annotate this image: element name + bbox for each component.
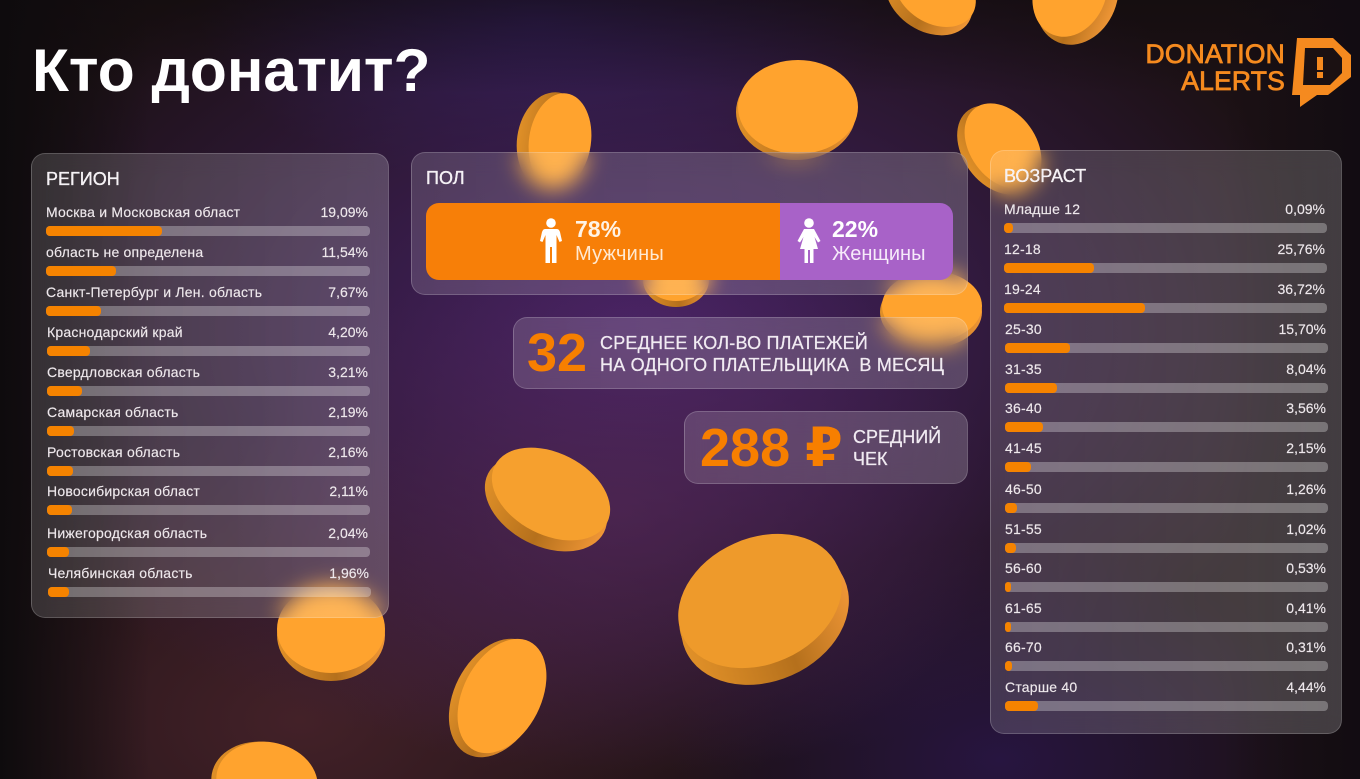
row: Санкт-Петербург: 7,67% [328,284,368,300]
row: 66-70: 66-70 [1005,639,1042,655]
stat caption: НА ОДНОГО ПЛАТЕЛЬЩИКА В МЕСЯЦ [600,355,944,375]
coin top centre-right [871,0,989,51]
row: 51-55 [1005,521,1328,553]
segment: men [426,203,780,280]
row: Челябинская: 1,96% [329,565,369,581]
logo: Donation Alerts [1146,38,1351,107]
row: не определена: область не определена [46,244,203,260]
stat caption [853,426,941,469]
men label: Мужчины [575,243,664,265]
coin under gender panel [643,247,709,307]
row: Челябинская: Челябинская область [48,565,193,581]
segment: women [780,203,953,280]
row: 56-60 [1005,560,1328,592]
row: 12-18: 12-18 [1004,241,1041,257]
row: 36-40 [1005,400,1328,432]
coin below region panel [277,585,385,681]
row: 46-50: 46-50 [1005,481,1042,497]
row: 61-65 [1005,600,1328,632]
row: Нижегородская [47,525,370,557]
stat number 32: 32 [527,323,587,383]
row: over 40: 4,44% [1286,679,1326,695]
row: 12-18: 25,76% [1278,241,1325,257]
row: 36-40: 3,56% [1286,400,1326,416]
row: 61-65: 61-65 [1005,600,1042,616]
row: Краснодарский край: Краснодарский край [47,324,183,340]
panel: gender [411,152,968,295]
row: Самарская: Самарская область [47,404,179,420]
panel: region [31,153,389,618]
row: Свердловская [47,364,370,396]
row: 19-24: 19-24 [1004,281,1041,297]
row: Новосибирская [47,483,370,515]
row: 61-65: 0,41% [1286,600,1326,616]
title: Кто донатит? [32,36,430,104]
row: 31-35: 31-35 [1005,361,1042,377]
row: 19-24: 36,72% [1278,281,1325,297]
coin right of stats [880,271,982,348]
row: Новосибирская: 2,11% [329,483,368,499]
row: Свердловская: 3,21% [328,364,368,380]
row: не определена: 11,54% [322,244,368,260]
row: 56-60: 56-60 [1005,560,1042,576]
row: Ростовская: Ростовская область [47,444,180,460]
heading: gender: ПОЛ [426,168,465,188]
icon: woman [798,218,820,263]
stat caption [600,332,944,376]
stat card: average check [684,411,968,484]
coin top right [1019,0,1133,57]
row: 46-50 [1005,481,1328,513]
row: 25-30: 15,70% [1279,321,1326,337]
row: over 40 [1005,679,1328,711]
row: over 40: Старше 40 [1005,679,1077,695]
row: under 12: Младше 12 [1004,201,1080,217]
row: 66-70: 0,31% [1286,639,1326,655]
row: Ростовская [47,444,370,476]
coin behind gender panel right [941,89,1057,210]
row: 31-35 [1005,361,1328,393]
row: 36-40: 36-40 [1005,400,1042,416]
row: Самарская: 2,19% [328,404,368,420]
coin upper centre [736,60,858,160]
row: Самарская [47,404,370,436]
row: Санкт-Петербург: Санкт-Петербург и Лен. область [46,284,262,300]
coin bottom centre-left [430,623,564,773]
coin middle [469,429,626,571]
row: не определена [46,244,370,276]
row: Краснодарский край [47,324,370,356]
icon: man [540,218,562,263]
row: Новосибирская: Новосибирская област [47,483,200,499]
heading: age: ВОЗРАСТ [1004,166,1086,186]
row: under 12 [1004,201,1327,233]
row: Нижегородская: Нижегородская область [47,525,207,541]
row: Челябинская [48,565,371,597]
row: Нижегородская: 2,04% [328,525,368,541]
stat caption: ЧЕК [853,449,888,469]
stat card: average payments [513,317,968,389]
logo wordmark [1146,39,1285,96]
row: 19-24 [1004,281,1327,313]
row: 51-55: 51-55 [1005,521,1042,537]
men value: 78% [575,216,621,242]
row: 31-35: 8,04% [1286,361,1326,377]
row: Москва [46,204,370,236]
row: 46-50: 1,26% [1286,481,1326,497]
row: Ростовская: 2,16% [328,444,368,460]
row: 41-45: 2,15% [1286,440,1326,456]
row: 25-30: 25-30 [1005,321,1042,337]
stat caption: СРЕДНЕЕ КОЛ-ВО ПЛАТЕЖЕЙ [600,333,868,353]
row: 56-60: 0,53% [1286,560,1326,576]
row: Краснодарский край: 4,20% [328,324,368,340]
coin behind gender panel left [511,88,597,194]
row: under 12: 0,09% [1285,201,1325,217]
row: 41-45 [1005,440,1328,472]
logo wordmark: DONATION [1146,39,1285,69]
row: Москва: Москва и Московская област [46,204,240,220]
row: Санкт-Петербург [46,284,370,316]
women value: 22% [832,216,878,242]
row: 12-18 [1004,241,1327,273]
row: Свердловская: Свердловская область [47,364,200,380]
women label: Женщины [832,243,925,265]
row: 51-55: 1,02% [1286,521,1326,537]
coin large bottom centre [657,509,871,711]
icon: logo speech bubble [1292,38,1351,107]
panel: age [990,150,1342,734]
stat caption: СРЕДНИЙ [853,427,941,447]
row: 66-70 [1005,639,1328,671]
row: 25-30 [1005,321,1328,353]
heading: region: РЕГИОН [46,169,120,189]
stat number 288: 288 ₽ [700,418,843,478]
gender bar [426,203,953,280]
row: Москва: 19,09% [321,204,368,220]
logo wordmark: ALERTS [1181,66,1285,96]
coin bottom left [205,734,324,779]
row: 41-45: 41-45 [1005,440,1042,456]
